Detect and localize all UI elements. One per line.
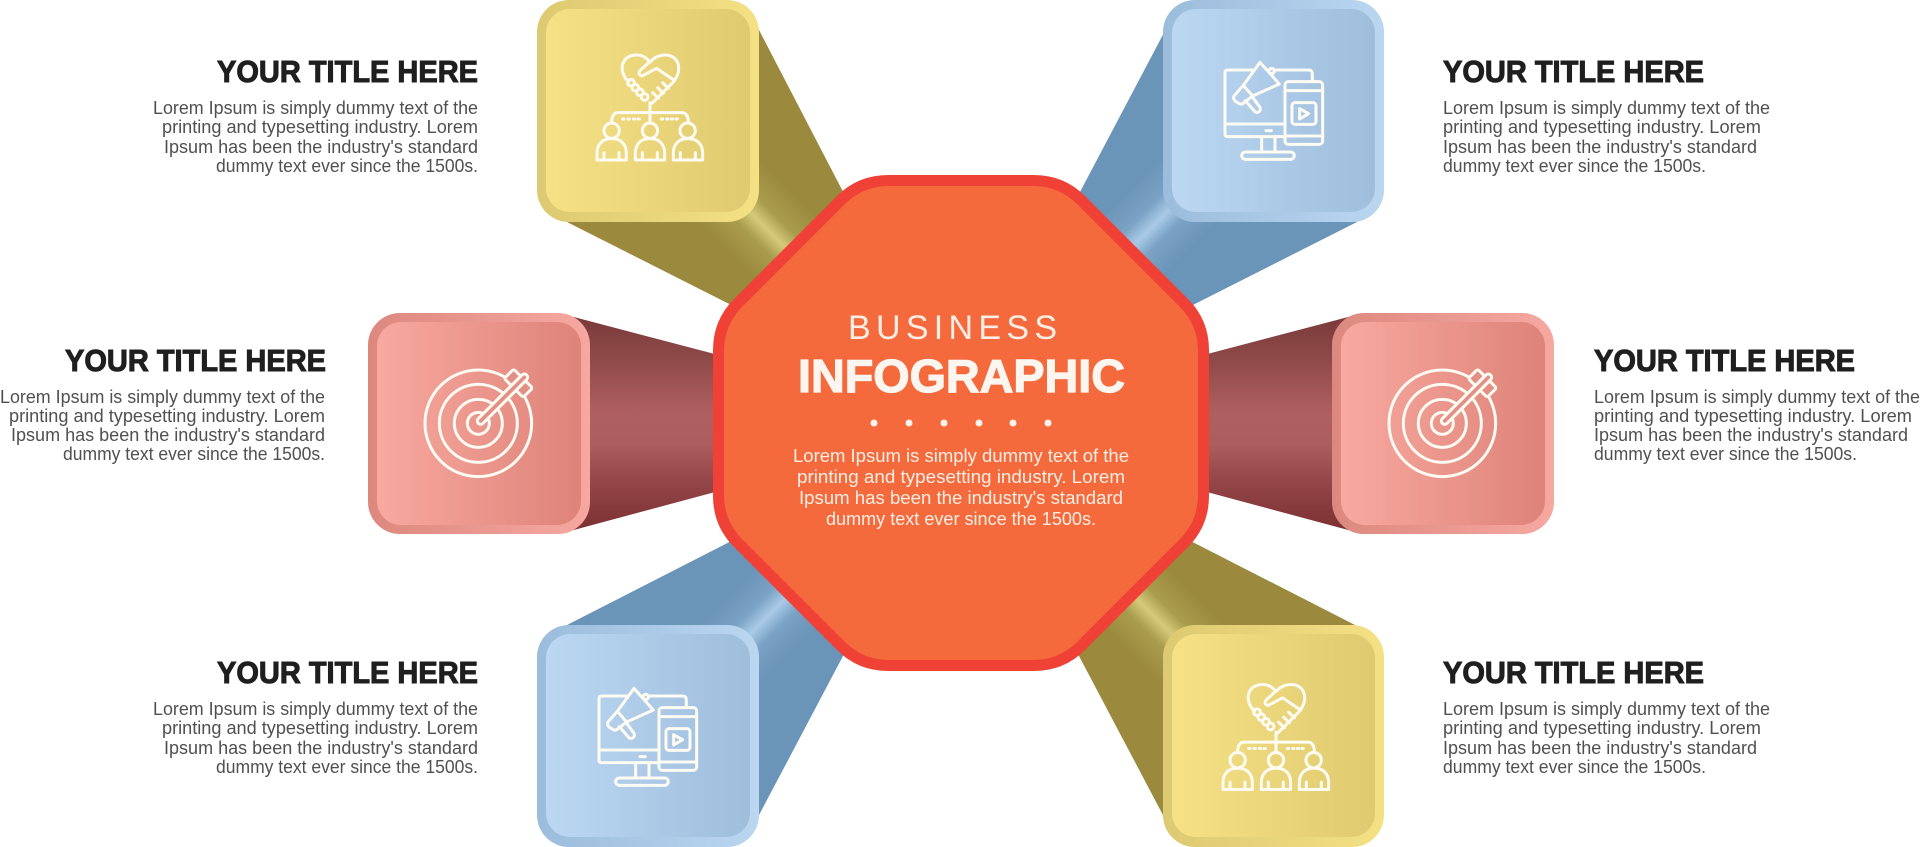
text block: middle-right: Lorem Ipsum is simply dummy text of the — [1594, 387, 1920, 407]
text block: middle-left: printing and typesetting industry. Lorem — [9, 406, 325, 426]
tile: left red with target icon — [368, 313, 590, 534]
center heading: business: BUSINESS — [848, 309, 1057, 347]
text block: middle-left: dummy text ever since the 1500s. — [63, 444, 325, 464]
extrusion: bottom-right yellow — [1070, 533, 1355, 817]
extrusion: top-left yellow — [563, 28, 852, 313]
text block: bottom-right: Ipsum has been the industry's standard — [1443, 738, 1757, 758]
center dots row — [870, 420, 1052, 426]
center heading: infographic: INFOGRAPHIC — [798, 350, 1125, 402]
tile: top-right blue with media icon — [1163, 0, 1384, 222]
text block: top-right: Lorem Ipsum is simply dummy text of the — [1443, 98, 1770, 118]
extrusion: left red — [570, 316, 730, 531]
text block: middle-right: dummy text ever since the 1500s. — [1594, 444, 1857, 464]
text block: bottom-right: dummy text ever since the 1500s. — [1443, 757, 1706, 777]
center body text — [793, 446, 1129, 529]
text block: bottom-right: YOUR TITLE HERE — [1443, 655, 1704, 690]
text block: middle-right — [1594, 343, 1920, 464]
text block: top-right: YOUR TITLE HERE — [1443, 54, 1704, 89]
tile: bottom-left blue with media icon — [537, 625, 759, 847]
text block: top-right: dummy text ever since the 1500s. — [1443, 156, 1706, 176]
text block: bottom-right — [1443, 655, 1770, 777]
text block: bottom-left: Lorem Ipsum is simply dummy text of the — [153, 699, 478, 719]
center body text: Ipsum has been the industry's standard — [799, 488, 1123, 508]
text block: top-left — [153, 54, 478, 176]
tile: bottom-right yellow with handshake icon — [1163, 625, 1384, 847]
extrusion: bottom-left blue — [567, 533, 852, 817]
text block: middle-right: printing and typesetting industry. Lorem — [1594, 406, 1912, 426]
center body text: dummy text ever since the 1500s. — [826, 509, 1096, 529]
text block: bottom-left: YOUR TITLE HERE — [217, 655, 478, 690]
text block: middle-left: YOUR TITLE HERE — [65, 343, 326, 378]
text block: top-right: Ipsum has been the industry's standard — [1443, 137, 1757, 157]
tile: top-left yellow with handshake icon — [537, 0, 759, 222]
text block: top-left: YOUR TITLE HERE — [217, 54, 478, 89]
text block: bottom-right: printing and typesetting industry. Lorem — [1443, 718, 1761, 738]
text block: top-right: printing and typesetting industry. Lorem — [1443, 117, 1761, 137]
text block: top-left: Ipsum has been the industry's standard — [164, 137, 478, 157]
text block: middle-left: Ipsum has been the industry's standard — [11, 425, 325, 445]
text block: bottom-left: printing and typesetting industry. Lorem — [162, 718, 478, 738]
text block: middle-left: Lorem Ipsum is simply dummy text of the — [0, 387, 325, 407]
text block: bottom-right: Lorem Ipsum is simply dummy text of the — [1443, 699, 1770, 719]
text block: middle-left — [0, 343, 326, 464]
center body text: Lorem Ipsum is simply dummy text of the — [793, 446, 1129, 466]
center body text: printing and typesetting industry. Lorem — [797, 467, 1125, 487]
text block: bottom-left — [153, 655, 478, 777]
extrusion: top-right blue — [1071, 27, 1357, 313]
text block: top-right — [1443, 54, 1770, 176]
extrusion: right red — [1192, 316, 1352, 531]
text block: top-left: printing and typesetting industry. Lorem — [162, 117, 478, 137]
text block: bottom-left: Ipsum has been the industry's standard — [164, 738, 478, 758]
text block: middle-right: Ipsum has been the industry's standard — [1594, 425, 1908, 445]
text block: bottom-left: dummy text ever since the 1500s. — [216, 757, 478, 777]
central octagon panel — [713, 175, 1209, 671]
text block: top-left: dummy text ever since the 1500s. — [216, 156, 478, 176]
text block: top-left: Lorem Ipsum is simply dummy text of the — [153, 98, 478, 118]
text block: middle-right: YOUR TITLE HERE — [1594, 343, 1855, 378]
tile: right red with target icon — [1332, 313, 1554, 534]
